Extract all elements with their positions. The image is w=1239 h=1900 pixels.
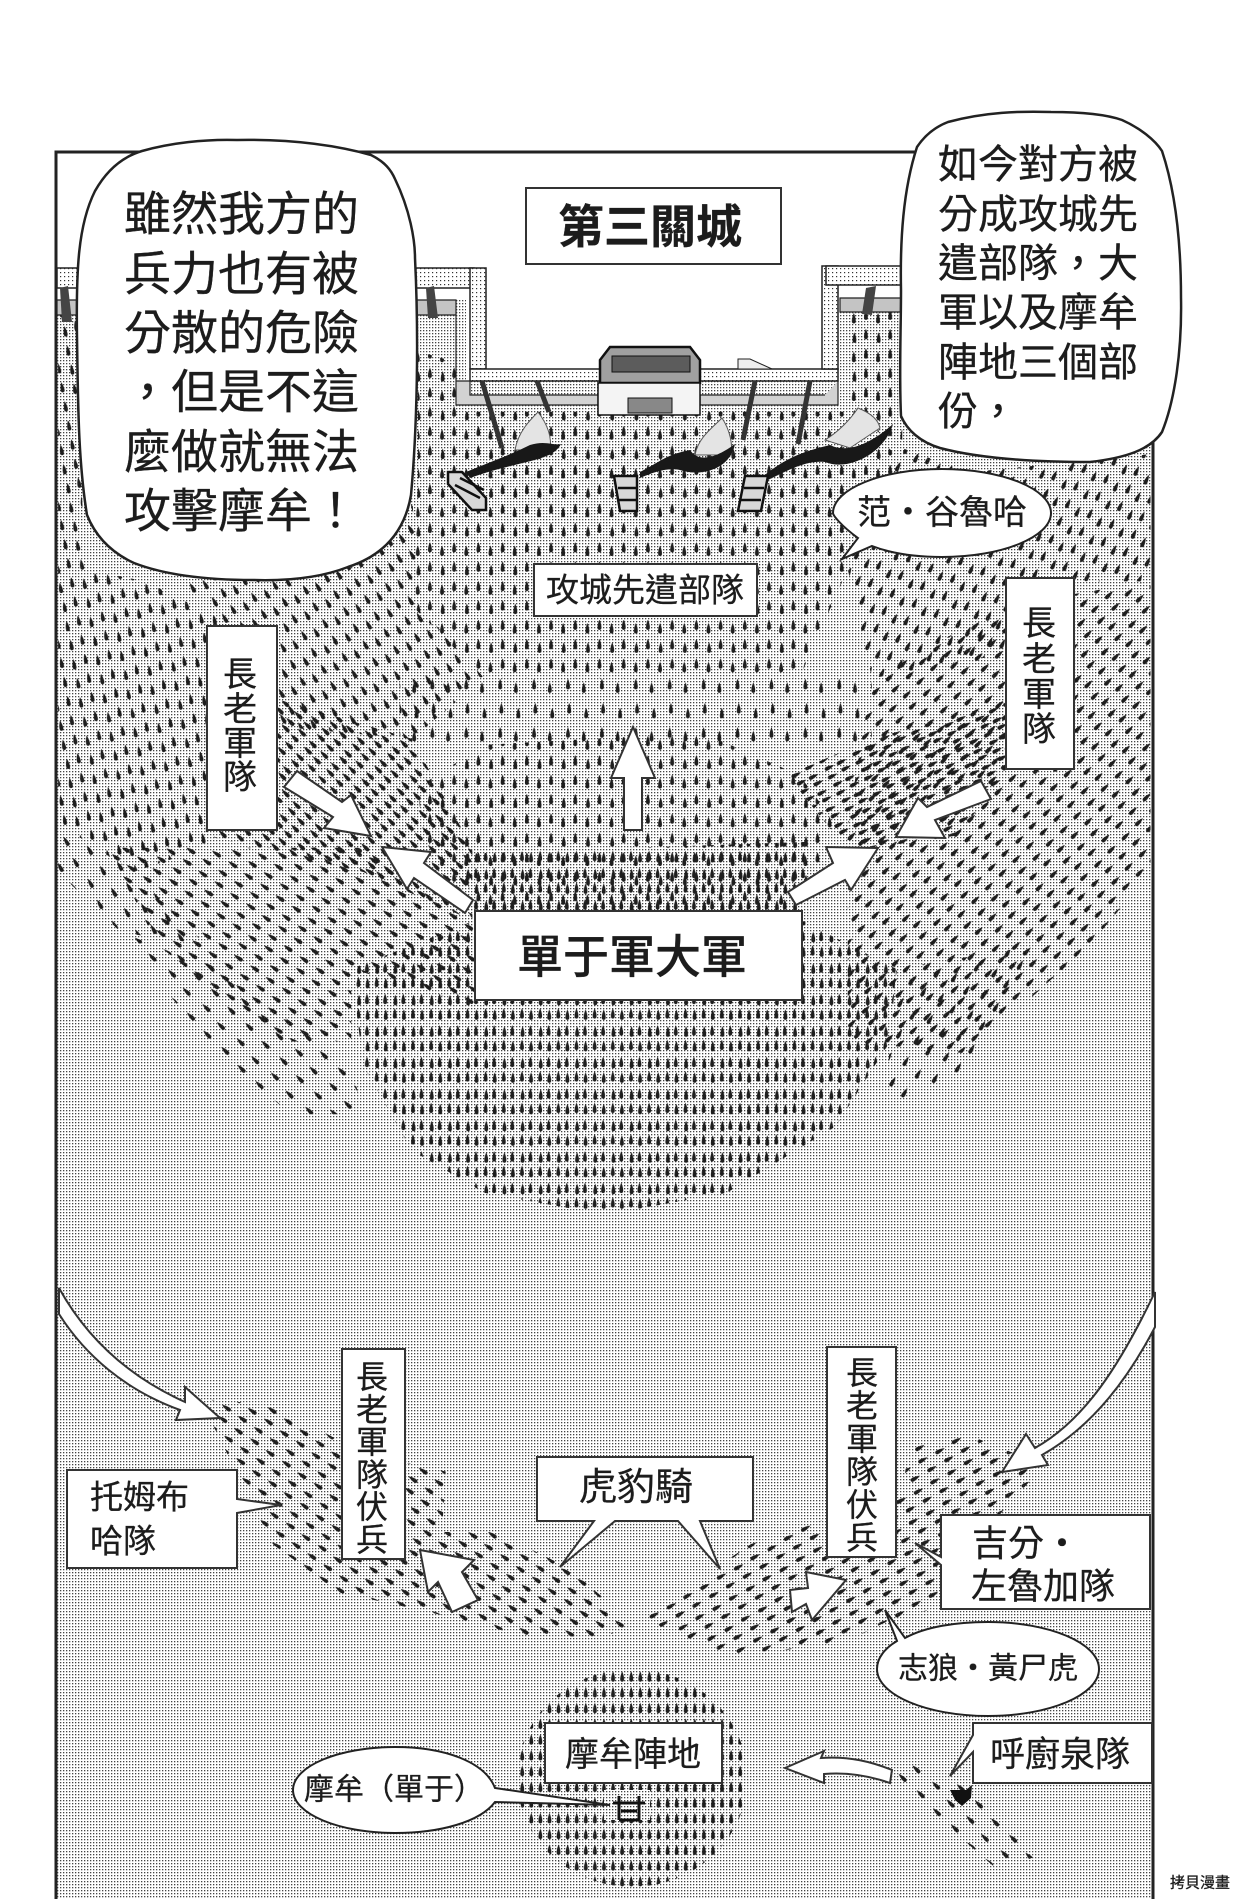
label: elder ambush right: 長	[846, 1355, 878, 1391]
label: elder army left	[207, 626, 277, 830]
bubble text right	[938, 143, 1138, 434]
speech bubble: right	[900, 112, 1181, 462]
troops: right scatter	[884, 945, 1042, 1114]
label: main army	[475, 911, 802, 1000]
arrow: outward left	[382, 847, 473, 913]
label: siege vanguard: 攻城先遣部隊	[546, 572, 744, 608]
label: elder army right: 老	[1022, 641, 1056, 679]
wall: left	[57, 268, 474, 288]
arrow: small right ambush	[790, 1572, 846, 1620]
burnt trail right	[766, 424, 893, 480]
bubble text left: ，但是不這	[124, 366, 359, 418]
label: elder ambush right: 兵	[846, 1520, 878, 1556]
label: elder army left: 老	[223, 691, 257, 729]
label: tiger leopard cavalry: 虎豹騎	[579, 1467, 693, 1509]
label: Jifen Zuolujia unit	[915, 1515, 1150, 1609]
troops: right strip by wall	[844, 303, 902, 448]
arrow: Huchuquan toward camp	[785, 1751, 892, 1783]
troops: main army bowl	[351, 920, 896, 1215]
troops: elder army left upper	[157, 484, 484, 739]
troops: elder army right	[848, 581, 1151, 1054]
bubble text right: 遣部隊，大	[938, 242, 1138, 286]
troops: left ambush	[200, 1399, 632, 1637]
wall gate far left	[60, 286, 72, 322]
arrow: outward right	[788, 847, 878, 905]
label: elder army right: 長	[1022, 605, 1056, 643]
bubble text left: 攻擊摩牟！	[124, 484, 359, 538]
gate roof	[600, 347, 700, 383]
gate door	[628, 398, 672, 413]
icon: Huchuquan leader	[950, 1785, 972, 1806]
burnt trail middle	[640, 444, 735, 478]
wall: left vertical	[470, 268, 486, 369]
callout: Zhilang Huangshihu: 志狼・黃尸虎	[898, 1652, 1078, 1686]
label: elder army left: 軍	[223, 725, 257, 763]
callout: Fan Guluha	[833, 469, 1051, 559]
title box: 第三關城	[558, 201, 742, 253]
wall: right outer moat	[700, 381, 838, 405]
gate body	[598, 383, 700, 415]
label: elder army left: 長	[223, 656, 257, 694]
bubble text left: 分散的危險	[124, 306, 359, 360]
castle inner courtyard	[466, 153, 838, 369]
label: Modu camp: 摩牟陣地	[565, 1736, 701, 1774]
bubble text right: 陣地三個部	[938, 341, 1138, 385]
label: elder ambush left: 伏	[356, 1489, 388, 1525]
troops: pale centre scatter	[400, 678, 872, 751]
fire smoke middle	[695, 418, 732, 455]
label: elder ambush left	[342, 1349, 405, 1559]
arrow: inward left	[284, 771, 371, 836]
label: elder ambush right: 軍	[846, 1421, 878, 1457]
arrow: curved left flank	[59, 1288, 220, 1420]
callout: Fan Guluha: 范・谷魯哈	[857, 494, 1027, 532]
bubble text left: 麼做就無法	[124, 426, 359, 478]
label: Tumbuha unit: 哈隊	[90, 1522, 156, 1560]
label: elder ambush left: 兵	[356, 1522, 388, 1558]
bubble text right: 分成攻城先	[938, 193, 1138, 237]
troops: main army dome	[418, 733, 836, 908]
label: elder ambush right: 伏	[846, 1487, 878, 1523]
title box	[526, 188, 781, 264]
troops: left scatter	[121, 933, 363, 1114]
label: Tumbuha unit: 托姆布	[90, 1478, 189, 1516]
label: elder ambush right	[827, 1347, 896, 1557]
panel: halftone ground	[57, 300, 1153, 1898]
label: Modu camp	[545, 1723, 722, 1783]
wall: right	[826, 266, 1153, 285]
label: elder army right	[1006, 578, 1074, 769]
callout: Modu	[293, 1747, 610, 1833]
arrow: curved right flank	[1002, 1292, 1155, 1472]
siege tower right	[738, 476, 768, 511]
castle	[57, 153, 1153, 511]
callout: Zhilang Huangshihu	[877, 1610, 1099, 1716]
wall gate left	[426, 286, 438, 318]
troops: elder army left lower	[109, 848, 475, 1042]
label: elder army left: 隊	[223, 759, 257, 797]
label: elder army right: 軍	[1022, 676, 1056, 714]
wall: bottom	[470, 369, 838, 381]
callout: Modu: 摩牟（單于）	[304, 1774, 484, 1806]
label: siege vanguard	[534, 564, 757, 616]
label: Huchuquan unit	[950, 1723, 1152, 1783]
arrow: small left ambush	[420, 1550, 478, 1612]
label: elder army right: 隊	[1022, 711, 1056, 749]
bubble text right: 份，	[938, 390, 1018, 434]
label: main army: 單于軍大軍	[517, 931, 747, 983]
wall: left outer moat	[456, 315, 598, 405]
troops: right ambush	[646, 1435, 1044, 1657]
icon: Modu banner	[613, 1796, 645, 1820]
label: elder ambush right: 隊	[846, 1454, 878, 1490]
troops: siege vanguard	[412, 351, 902, 678]
wall: right lower band	[840, 298, 1153, 312]
gate roof ridge	[612, 356, 690, 372]
label: elder ambush right: 老	[846, 1388, 878, 1424]
label: elder ambush left: 長	[356, 1359, 388, 1395]
bubble text left: 雖然我方的	[124, 188, 359, 240]
label: elder ambush left: 老	[356, 1392, 388, 1428]
troops: main army dome lower	[460, 842, 811, 911]
label: Huchuquan unit: 呼廚泉隊	[990, 1736, 1130, 1774]
siege tower left	[448, 472, 486, 510]
troops: right dense band	[787, 702, 1005, 848]
bubble text right: 如今對方被	[938, 143, 1138, 187]
bubble text right: 軍以及摩牟	[938, 291, 1138, 335]
wall: left lower band	[57, 300, 456, 315]
troops: left lower edge	[58, 824, 206, 945]
arrow: inward right	[896, 781, 991, 838]
speech bubble: left	[77, 140, 417, 580]
burnt trail left	[466, 443, 561, 478]
stair on wall	[738, 359, 772, 369]
label: tiger leopard cavalry	[537, 1457, 753, 1569]
clear patch around Modu marker	[604, 1790, 650, 1820]
siege tower middle	[614, 476, 637, 511]
label: Tumbuha unit	[67, 1470, 281, 1568]
label: Jifen Zuolujia unit: 吉分・	[972, 1522, 1080, 1564]
troops: upper right	[848, 448, 1151, 678]
bubble text left	[124, 188, 359, 538]
troops: left edge	[58, 303, 218, 872]
arrow: up	[611, 727, 655, 830]
troops: elder army left dense	[206, 678, 472, 920]
wall: right vertical	[822, 266, 838, 369]
label: elder ambush left: 軍	[356, 1424, 388, 1460]
fire smoke left	[515, 412, 550, 450]
fire smoke right	[825, 408, 880, 448]
siege ladders	[482, 381, 810, 448]
bubble text left: 兵力也有被	[124, 248, 359, 300]
label: Jifen Zuolujia unit: 左魯加隊	[971, 1566, 1115, 1606]
label: elder ambush left: 隊	[356, 1457, 388, 1493]
troops: Modu camp	[517, 1669, 747, 1887]
troop formations	[58, 303, 1151, 1887]
wall gate right	[862, 286, 876, 315]
watermark: 拷貝漫畫	[1170, 1874, 1230, 1892]
troops: Huchuquan unit	[888, 1766, 1044, 1871]
